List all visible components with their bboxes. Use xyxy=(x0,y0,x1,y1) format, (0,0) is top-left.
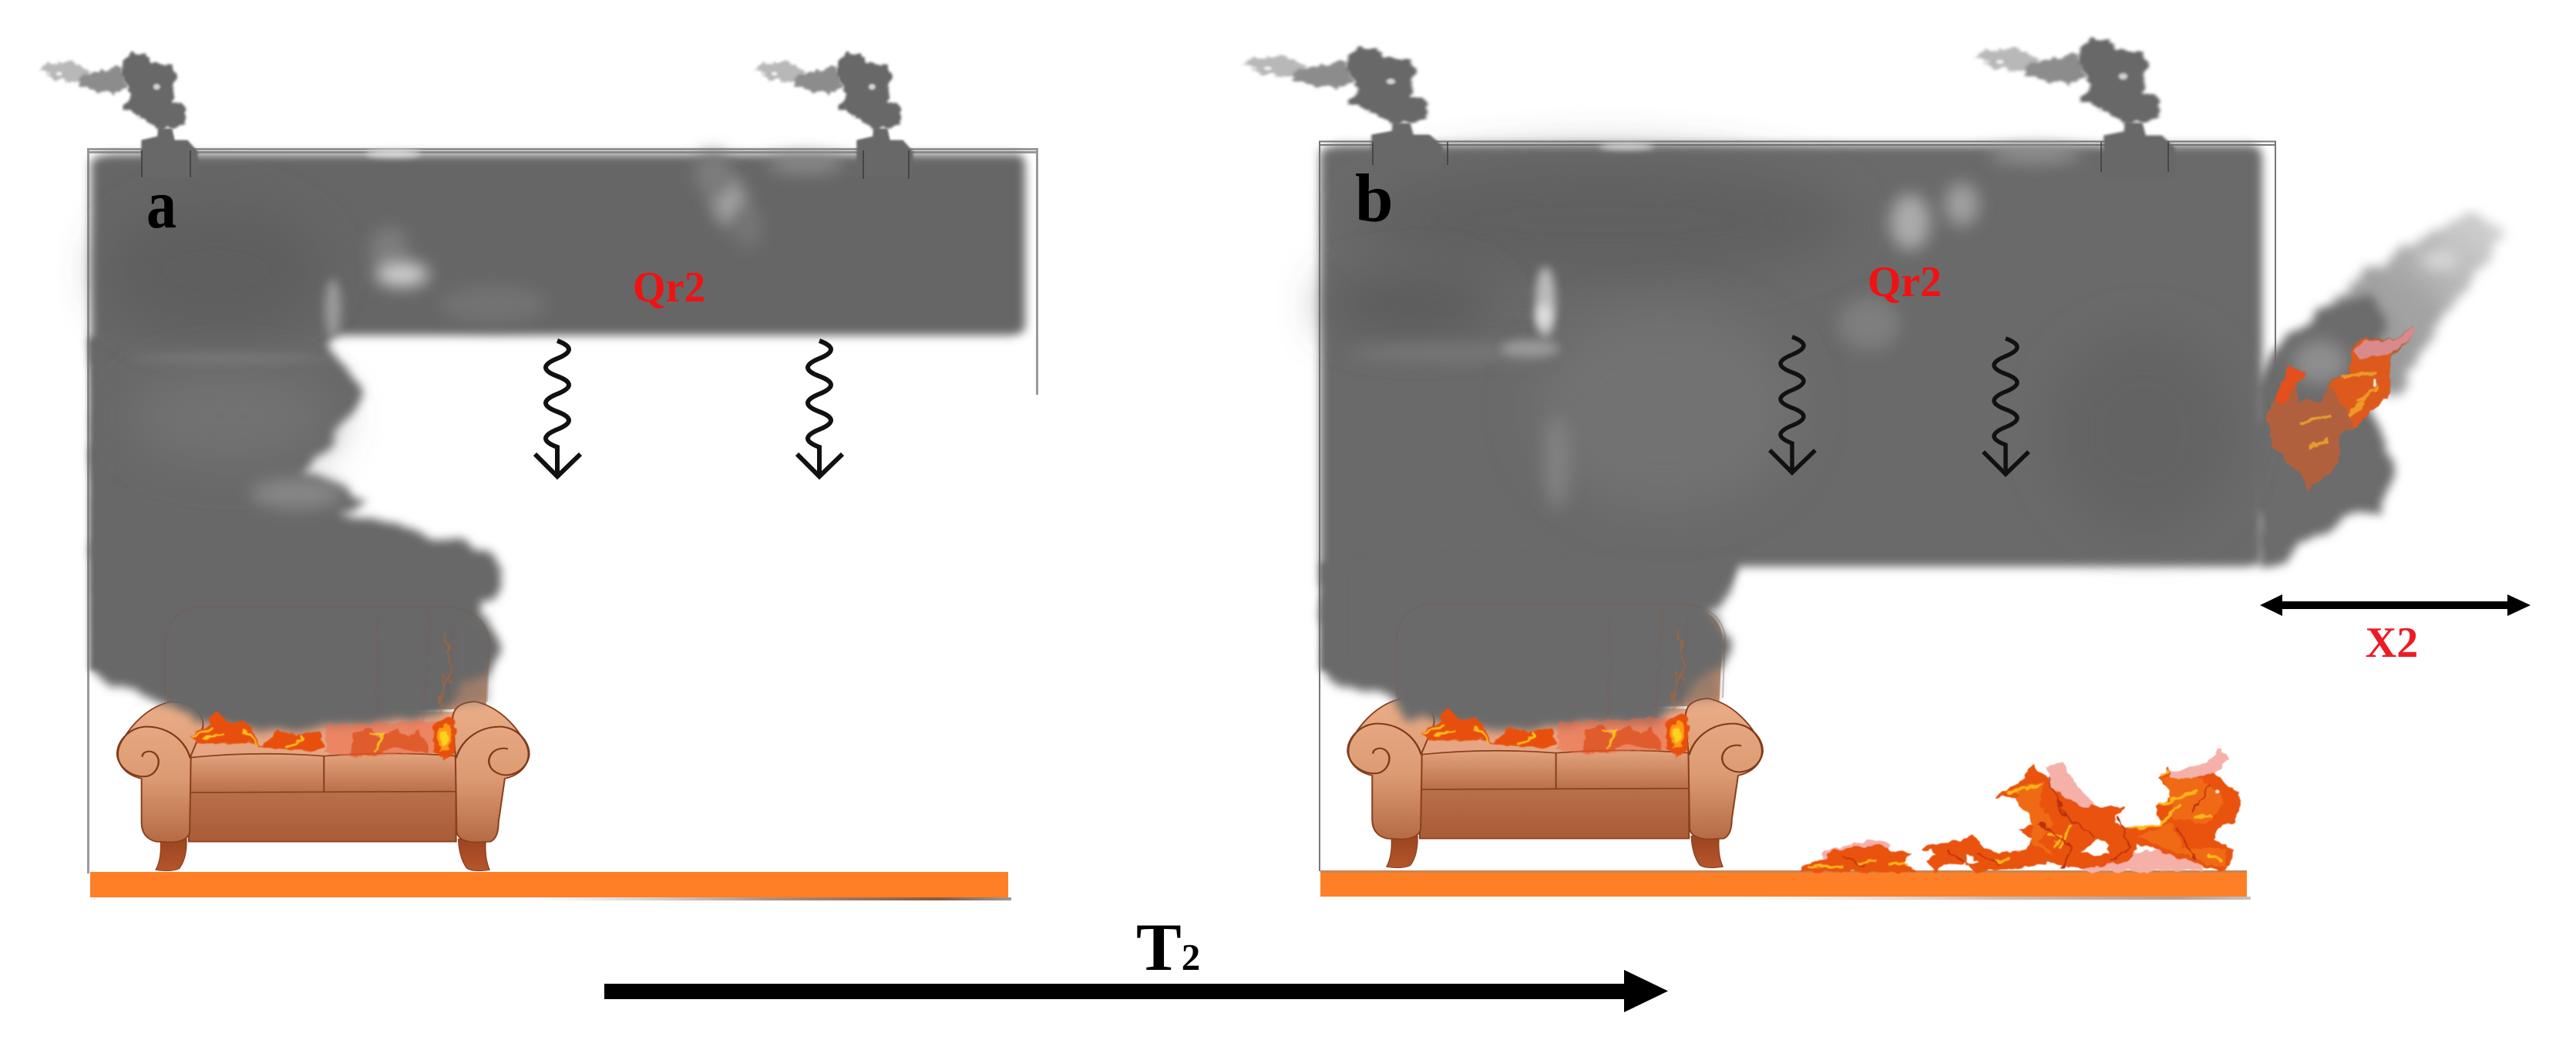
smoke veil over sofa back a xyxy=(455,617,490,705)
vent lines b xyxy=(1373,142,2168,172)
label Qr2 a: Qr2 xyxy=(633,264,705,311)
room frame b xyxy=(1320,142,2275,871)
radiation arrow b left xyxy=(1770,337,1815,473)
sofa a xyxy=(117,608,529,871)
floor a xyxy=(90,872,1011,900)
smoke veil over sofa back b xyxy=(1685,614,1720,702)
label b: b xyxy=(1355,161,1394,237)
sofa back outline seen through smoke a xyxy=(165,608,489,702)
ceiling vent smoke a left xyxy=(39,52,198,177)
double arrow X2 xyxy=(2260,594,2531,616)
label Qr2 b: Qr2 xyxy=(1868,258,1942,306)
sofa b xyxy=(1348,604,1763,868)
floor b xyxy=(1320,870,2251,900)
panel a: room with smoke layer and burning sofa xyxy=(39,52,1037,900)
time arrow xyxy=(604,970,1668,1012)
radiation arrow a left xyxy=(535,341,580,476)
label a: a xyxy=(146,167,177,243)
label X2: X2 xyxy=(2366,619,2418,667)
sofa back outline seen through smoke b xyxy=(1397,604,1725,698)
room frame a xyxy=(88,150,1037,873)
exterior smoke plume xyxy=(2247,218,2505,569)
smoke layer b xyxy=(1320,143,2262,729)
sofa flames a xyxy=(192,611,456,759)
radiation arrow a right xyxy=(797,341,842,476)
radiation arrow b right xyxy=(1983,338,2029,474)
ceiling vent smoke b left xyxy=(1242,46,1443,172)
panel b: smoke filled room with flashover and floor flames xyxy=(1242,37,2531,900)
exterior flame xyxy=(2266,325,2414,492)
time label T2: T2 xyxy=(1136,910,1200,985)
ceiling vent smoke a right xyxy=(754,52,913,177)
smoke layer a xyxy=(89,150,1025,729)
floor flames xyxy=(1803,748,2241,872)
sofa flames b xyxy=(1423,608,1689,756)
vent lines a xyxy=(142,150,909,179)
ceiling vent smoke b right xyxy=(1974,37,2175,177)
